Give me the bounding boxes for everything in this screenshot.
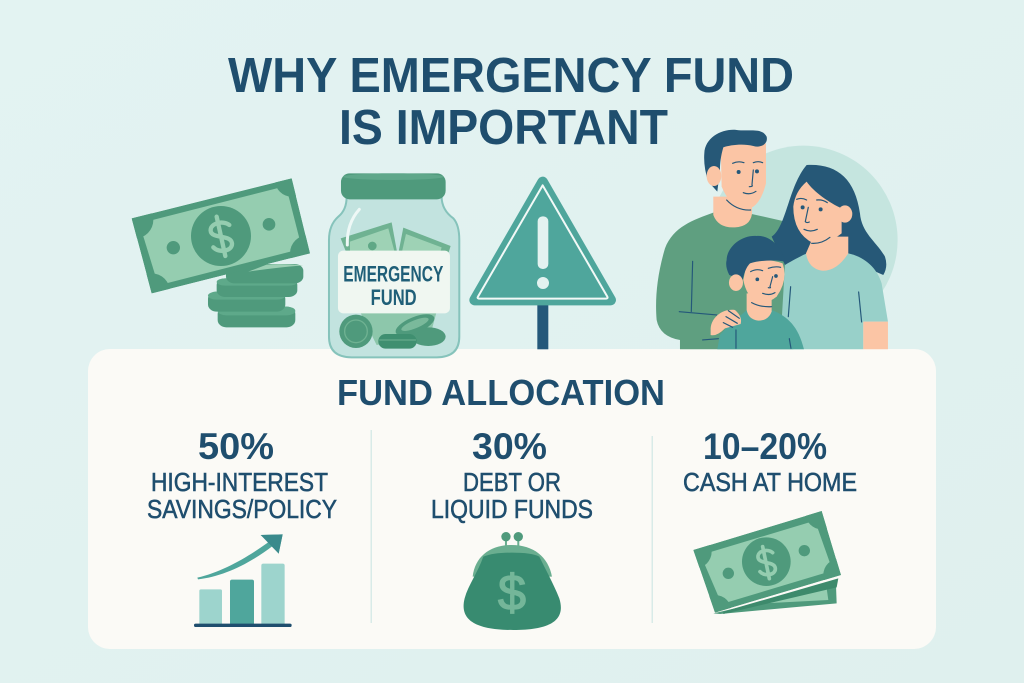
title: IS IMPORTANT [339, 101, 668, 155]
child [711, 236, 804, 349]
jar coins [339, 310, 446, 349]
icon: growth bar chart [194, 534, 292, 627]
heading: fund allocation: FUND ALLOCATION [337, 372, 665, 413]
icon: coin purse [464, 532, 561, 630]
icon: coin purse: $ [498, 564, 526, 620]
column: 50% high-interest savings: HIGH-INTEREST [151, 469, 328, 497]
jar lid [341, 173, 446, 199]
column: 30% debt or liquid funds: 30% [472, 426, 547, 467]
jar label: EMERGENCY [343, 262, 444, 287]
jar bills [341, 222, 451, 253]
column: 30% debt or liquid funds [431, 426, 593, 524]
column: 10-20% cash at home [683, 426, 857, 497]
mother [772, 165, 888, 349]
icon: emergency fund jar [329, 173, 459, 357]
column: 10-20% cash at home: 10–20% [703, 426, 827, 467]
illustration: family [656, 130, 898, 349]
column: 50% high-interest savings [147, 426, 337, 524]
panel: fund allocation [88, 349, 936, 649]
father's hand [711, 310, 741, 335]
title [228, 49, 794, 155]
column: 30% debt or liquid funds: DEBT OR [463, 469, 561, 497]
icon: tilted banknote [132, 178, 310, 294]
title: WHY EMERGENCY FUND [228, 49, 794, 103]
column: 50% high-interest savings: SAVINGS/POLICY [147, 496, 337, 524]
background circle [709, 146, 898, 334]
father [656, 130, 793, 349]
icon: warning sign [475, 182, 611, 349]
column: 10-20% cash at home: CASH AT HOME [683, 469, 857, 497]
jar label: FUND [371, 285, 417, 310]
icon: cash stack [693, 511, 841, 614]
column: 30% debt or liquid funds: LIQUID FUNDS [431, 496, 593, 524]
icon: banknote and coins [132, 178, 310, 328]
icon: coin stack [208, 264, 303, 327]
jar label [338, 251, 450, 313]
column: 50% high-interest savings: 50% [198, 426, 274, 467]
